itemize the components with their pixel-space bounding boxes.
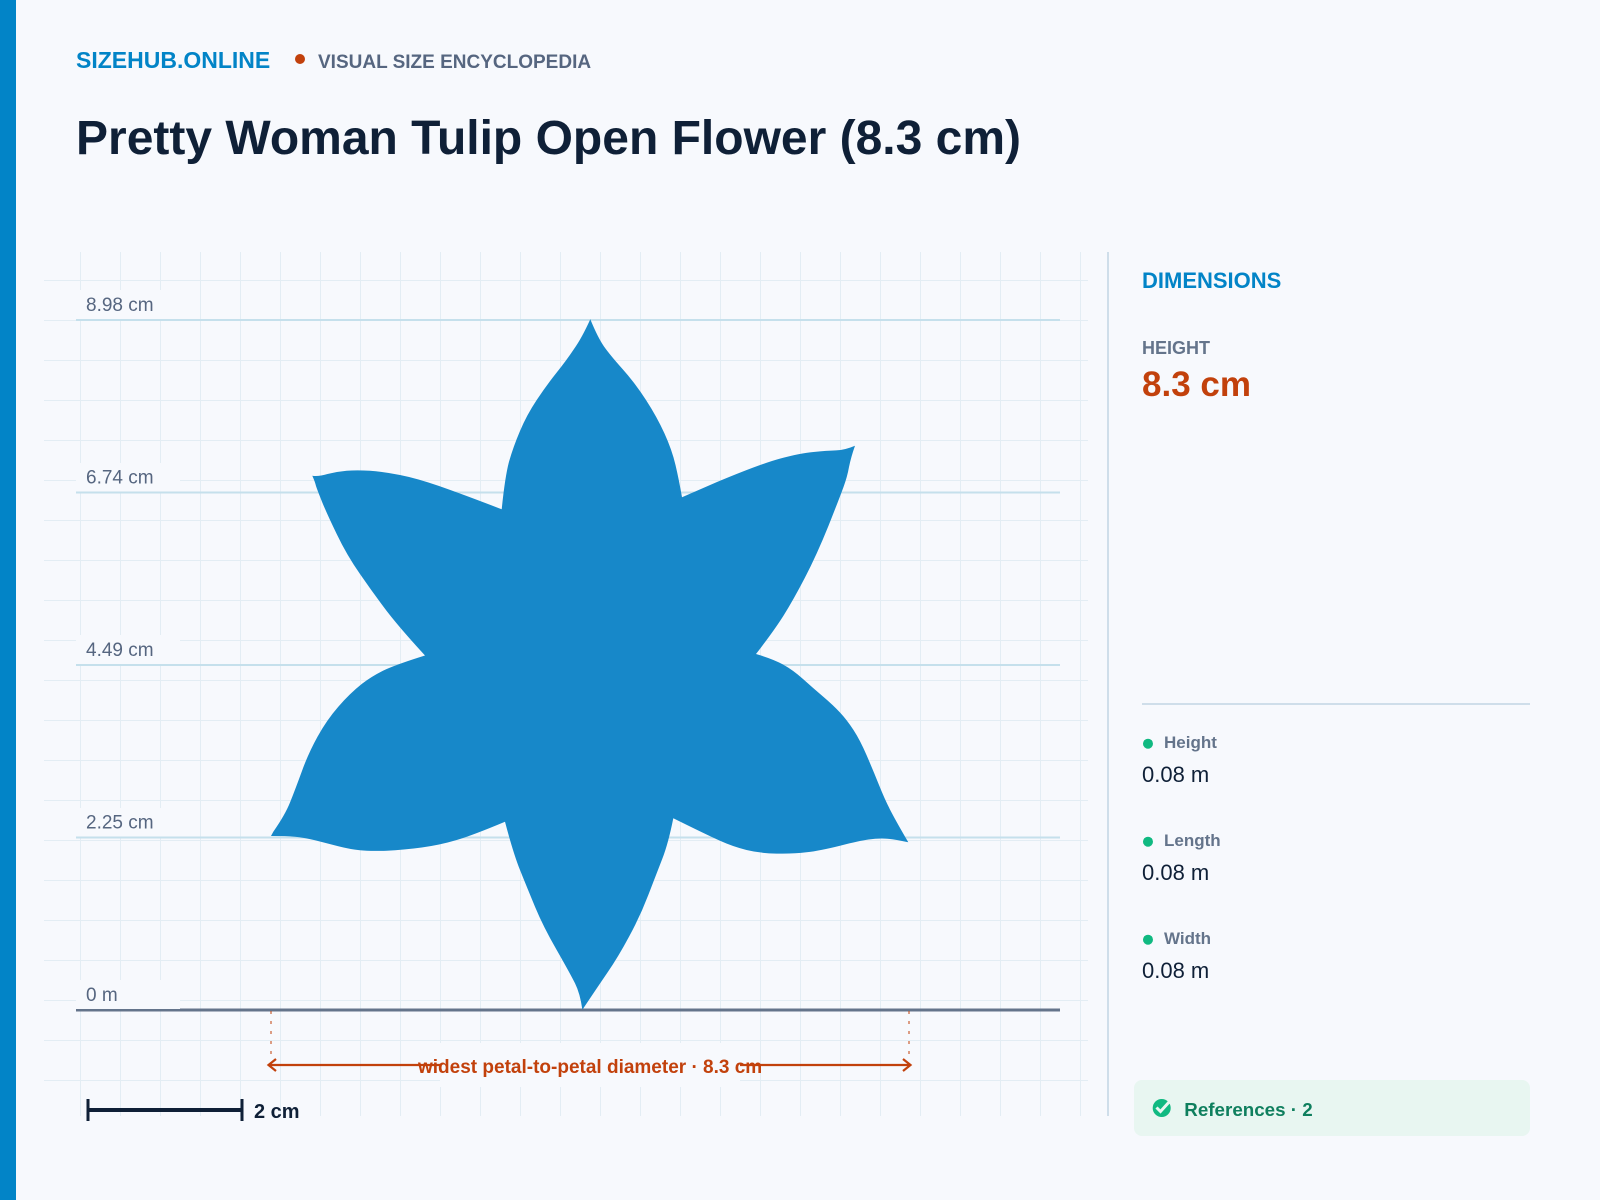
row: width: 0.08 m [1142, 958, 1209, 983]
title: Pretty Woman Tulip Open Flower (8.3 cm) [76, 112, 1021, 165]
ground baseline [76, 1008, 1060, 1012]
header dot [295, 54, 305, 64]
panel separator [1142, 703, 1530, 705]
height label: HEIGHT [1142, 338, 1210, 358]
height labels: 4.49 cm [86, 640, 154, 661]
flower silhouette [271, 319, 908, 1009]
height gridlines [76, 320, 1060, 838]
height value: 8.3 cm [1142, 365, 1251, 404]
row: length [1142, 831, 1221, 885]
height labels: 0 m [86, 985, 118, 1006]
height label backings [76, 290, 180, 836]
panel heading: DIMENSIONS [1142, 268, 1281, 293]
row: length: 0.08 m [1142, 860, 1209, 885]
brand name: SIZEHUB.ONLINE [76, 47, 270, 73]
chart: flower silhouette against height scale [44, 252, 1088, 1123]
header [76, 47, 1021, 165]
diameter measurement [268, 1011, 910, 1087]
vertical divider [1107, 252, 1109, 1116]
row: height [1142, 733, 1217, 787]
diameter measurement: widest petal-to-petal diameter · 8.3 cm [417, 1057, 762, 1078]
scale bar: 2 cm [254, 1101, 300, 1123]
height labels: 6.74 cm [86, 468, 154, 488]
icon: check circle [1153, 1099, 1171, 1117]
scale bar [88, 1099, 300, 1123]
tagline: VISUAL SIZE ENCYCLOPEDIA [318, 52, 591, 73]
references text: References · 2 [1184, 1099, 1313, 1120]
row: height: 0.08 m [1142, 762, 1209, 787]
references card [1134, 1080, 1530, 1136]
row: length: Length [1164, 831, 1221, 850]
left accent bar [0, 0, 16, 1200]
row: height: Height [1164, 733, 1217, 752]
row: width [1142, 929, 1211, 983]
height labels [76, 295, 180, 1009]
row: width: Width [1164, 929, 1211, 948]
height labels: 2.25 cm [86, 812, 154, 834]
height labels: 8.98 cm [86, 295, 154, 316]
panel: dimensions [1142, 268, 1530, 983]
background grid [44, 252, 1088, 1116]
